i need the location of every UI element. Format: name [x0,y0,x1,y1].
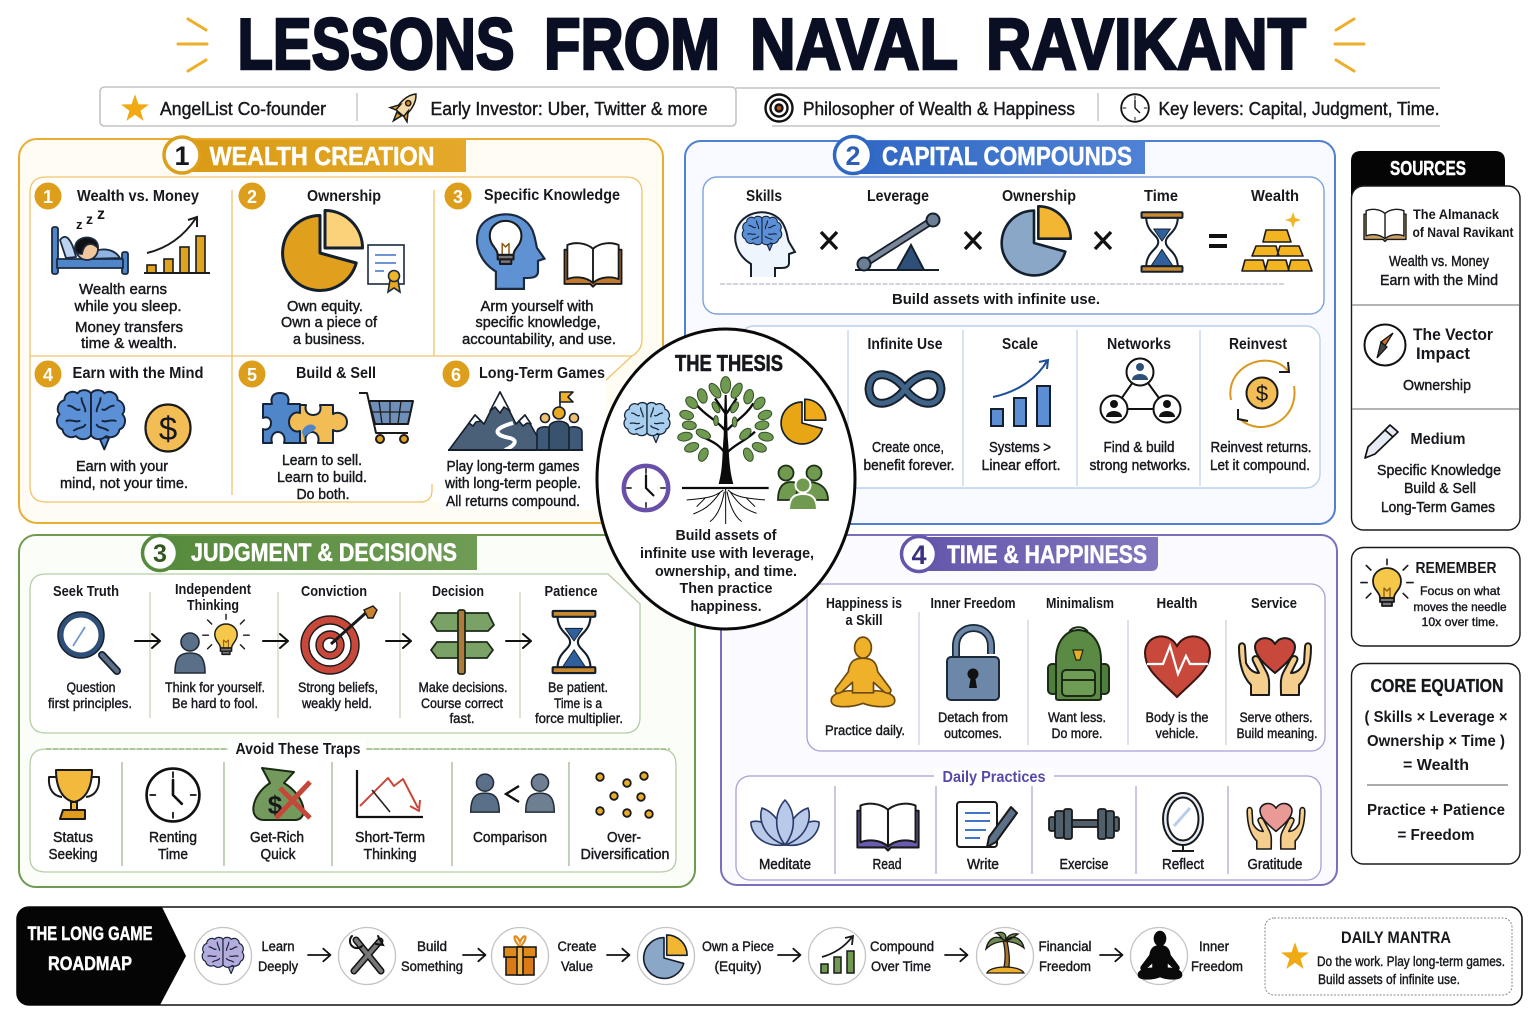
thesis circle: ownership, and time. [655,563,797,580]
icon: gratitude hands [1247,804,1305,849]
section: daily practices: Reflect [1162,857,1204,873]
source: medium [1365,425,1501,516]
roadmap title: THE LONG GAME [28,924,152,945]
icon: lever [855,214,940,270]
panel: sources [1351,151,1520,530]
source: the almanack: Wealth vs. Money [1389,254,1490,270]
icon: hourglass [1142,212,1182,272]
icon: multiply signs [821,232,1111,249]
row: happiness principles: a Skill [846,612,882,629]
card: earn with the mind [34,360,204,492]
roadmap title [17,907,186,1005]
row: happiness principles: Body is the [1146,710,1208,725]
title: FROM [544,5,720,85]
step: financial freedom: Freedom [1039,959,1091,974]
step: inner freedom: Freedom [1191,959,1243,974]
card: long-term games [442,360,605,510]
callout: remember [1352,548,1520,646]
source: the almanack: of Naval Ravikant [1412,224,1514,240]
icon: scaling bars [991,360,1050,426]
icon: rising bars [144,217,210,273]
icon: signpost [431,610,494,674]
icon: rocket [385,87,424,128]
row: decision flow: fast. [450,711,474,726]
callout: remember: 10x over time. [1422,615,1498,629]
card: ownership: 2 [247,187,257,207]
card: specific knowledge: 3 [453,187,463,207]
callout: remember: Focus on what [1420,584,1501,598]
equation: skills x leverage x ownership x time = wealth: Skills [746,188,782,205]
icon: equals sign [1209,236,1227,246]
section: avoid these traps: Quick [260,847,296,863]
card: build and sell: Learn to sell. [282,453,362,469]
row: decision flow: force multiplier. [535,711,623,726]
row: compounding levers: Networks [1107,336,1171,353]
source: the almanack: Earn with the Mind [1380,273,1498,289]
row: decision flow: Think for yourself. [165,680,265,695]
thesis circle [597,329,855,629]
subtitle bar: Philosopher of Wealth & Happiness [803,98,1075,119]
icon: network [1100,358,1180,422]
section: daily practices: Exercise [1060,857,1108,873]
card: specific knowledge [444,182,622,348]
section: avoid these traps: Thinking [364,847,416,863]
icon: notepad and pen [957,802,1017,847]
step: learn deeply: Deeply [258,959,298,974]
row: happiness principles: vehicle. [1156,726,1198,741]
icon: trophy [49,770,99,819]
card: build and sell [238,360,413,503]
section: daily practices [751,768,1305,873]
row: compounding levers: Infinite Use [868,336,943,353]
source: the vector impact: Ownership [1403,378,1471,394]
equation: skills x leverage x ownership x time = wealth: Build assets with infinite use. [892,291,1100,308]
icon: clock [1121,94,1149,122]
subtitle bar: Key levers: Capital, Judgment, Time. [1158,98,1440,119]
row: happiness principles: Health [1156,595,1198,612]
icon: certificate [368,245,404,292]
panel: judgment and decisions [19,535,695,887]
roadmap title: ROADMAP [48,954,132,975]
section: daily practices: Gratitude [1248,857,1302,873]
callout: core equation: Ownership × Time ) [1367,733,1505,750]
card: wealth vs money: 1 [43,187,53,207]
step: inner freedom: Inner [1199,939,1229,954]
icon: head with brain [735,212,795,277]
callout: core equation: CORE EQUATION [1370,675,1504,696]
callout: remember: REMEMBER [1416,560,1496,577]
row: decision flow: Course correct [421,696,503,711]
card: build and sell: Build & Sell [296,365,376,382]
icon: scattered dots [596,772,653,818]
thesis circle: THE THESIS [675,350,783,376]
icon: comparison [471,774,554,812]
row: decision flow: first principles. [48,696,132,711]
callout: core equation: ( Skills × Leverage × [1364,709,1508,726]
arrows [308,949,1122,961]
subtitle bar: Early Investor: Uber, Twitter & more [430,98,708,119]
row: happiness principles: Inner Freedom [930,595,1016,612]
row: compounding levers: Systems > [989,440,1051,456]
title [178,5,1364,85]
step: create value [504,936,596,975]
step: compound over time: Compound [870,939,934,954]
card: long-term games: 6 [451,365,461,385]
card: long-term games: Long-Term Games [479,365,605,382]
icon: gold bars [1242,230,1312,271]
callout: core equation: = Freedom [1398,827,1474,844]
row: decision flow [48,581,623,726]
row: decision flow: Decision [432,583,484,600]
panel: capital compounds [685,136,1335,524]
card: earn with the mind: 4 [43,365,53,385]
row: decision flow: Independent [175,581,251,598]
section: daily practices: Meditate [759,857,811,873]
icon: clock [147,769,199,821]
icon: sleeping in bed [52,227,128,274]
card: long-term games: All returns compound. [446,494,580,510]
icon: puzzle pieces [263,393,347,443]
row: compounding levers [864,336,1312,474]
subtitle bar [100,87,1440,128]
row: decision flow: Time is a [554,696,602,711]
section: daily practices: Write [967,857,999,873]
thesis circle: happiness. [690,598,762,615]
step: create value: Create [558,939,596,954]
card: ownership [238,182,404,348]
heading: judgment and decisions: 3 [153,540,167,568]
equation: skills x leverage x ownership x time = wealth: Ownership [1002,188,1076,205]
section: avoid these traps [48,741,670,863]
row: compounding levers: Reinvest [1229,336,1288,353]
equation: skills x leverage x ownership x time = wealth [735,188,1312,308]
icon: heart with pulse [1145,636,1210,697]
icon: backpack [1048,627,1109,700]
heading: wealth creation: 1 [174,141,190,171]
step: inner freedom [1138,931,1243,979]
callout: core equation: Practice + Patience [1367,802,1505,819]
source: the almanack [1364,206,1514,289]
row: decision flow: Make decisions. [418,680,508,695]
step: compound over time [821,936,934,974]
source: the almanack: The Almanack [1413,206,1499,222]
card: long-term games: Play long-term games [446,459,580,475]
step: build something [350,936,463,974]
heading: time and happiness: TIME & HAPPINESS [947,541,1147,569]
card: wealth vs money: Money transfers [75,320,183,336]
row: happiness principles [825,595,1318,741]
card: build and sell: Do both. [296,487,350,503]
row: happiness principles: Service [1251,595,1297,612]
icon: tree with roots [677,377,774,524]
source: medium: Specific Knowledge [1377,463,1501,479]
step: create value: Value [561,959,593,974]
heading: judgment and decisions: JUDGMENT & DECISIONS [191,539,457,567]
icon: magnifying glass [58,612,117,671]
step: build something: Something [401,959,463,974]
step: own a piece: (Equity) [714,959,762,974]
row: compounding levers: strong networks. [1090,458,1190,474]
icon: dumbbell [1049,809,1119,839]
card: build and sell: Learn to build. [277,470,367,486]
step: own a piece: Own a Piece [702,939,774,954]
step: learn deeply [202,937,298,974]
section: avoid these traps: Comparison [473,830,547,846]
icon: falling chart [357,770,423,817]
roadmap band [17,907,1522,1005]
thesis circle: Build assets of [676,527,777,544]
section: avoid these traps: Get-Rich [250,830,304,846]
section: avoid these traps: Time [158,847,188,863]
row: compounding levers: Create once, [872,440,944,456]
icon: dollar coin: $ [159,410,177,447]
heading: judgment and decisions [142,536,477,570]
arrows [135,634,531,648]
equation: skills x leverage x ownership x time = wealth: Wealth [1251,188,1299,205]
row: happiness principles: Serve others. [1240,710,1312,725]
row: happiness principles: Detach from [938,710,1008,725]
card: earn with the mind: mind, not your time. [60,476,188,492]
icon: open book [564,243,622,287]
panel: sources: SOURCES [1390,158,1466,180]
row: compounding levers: Let it compound. [1210,458,1310,474]
row: decision flow: Strong beliefs, [298,680,378,695]
heading: time and happiness [902,536,1158,572]
source: medium: Long-Term Games [1381,500,1495,516]
row: happiness principles: Practice daily. [825,723,905,738]
card: wealth vs money: Wealth earns [79,282,167,298]
card: ownership: Own equity. [287,299,363,315]
row: decision flow: Be hard to fool. [172,696,258,711]
card: wealth vs money: time & wealth. [81,336,177,352]
icon: mirror [1163,793,1203,851]
card: wealth vs money: while you sleep. [73,299,182,315]
icon: brain [624,403,670,442]
source: the vector impact: Impact [1416,345,1471,363]
card: specific knowledge: specific knowledge, [476,315,600,331]
card: wealth vs money: z [76,217,83,232]
callout: daily mantra [1265,918,1512,995]
heading: capital compounds: CAPITAL COMPOUNDS [882,141,1132,171]
card: wealth vs money [34,182,210,352]
card: specific knowledge: Specific Knowledge [484,187,620,204]
icon: brain [57,390,125,449]
thesis circle: infinite use with leverage, [640,545,814,562]
row: happiness principles: Minimalism [1046,595,1114,612]
panel: time and happiness [721,535,1337,885]
subtitle bar: AngelList Co-founder [160,98,326,119]
row: happiness principles: Build meaning. [1236,726,1318,741]
section: avoid these traps: Renting [149,830,197,846]
heading: wealth creation [164,137,466,173]
step: own a piece [644,935,774,978]
card: wealth vs money: Wealth vs. Money [77,188,199,205]
row: decision flow: Be patient. [548,680,608,695]
heading: capital compounds: 2 [845,141,861,171]
icon: target with arrow [301,606,377,674]
step: build something: Build [417,939,447,954]
thesis circle: Then practice [680,580,772,597]
callout: remember: moves the needle [1414,600,1507,614]
section: avoid these traps: Avoid These Traps [236,741,361,758]
callout: daily mantra: Do the work. Play long-term games. [1317,954,1505,969]
source: the vector impact [1364,324,1494,394]
title: NAVAL [750,5,958,85]
row: decision flow: Thinking [187,597,239,614]
card: wealth vs money: z [97,206,105,223]
icon: open book [857,804,919,850]
card: earn with the mind: Earn with the Mind [72,365,204,382]
row: happiness principles: Do more. [1052,726,1102,741]
row: compounding levers: benefit forever. [864,458,954,474]
heading: time and happiness: 4 [911,540,927,570]
source: medium: Medium [1410,431,1466,448]
equation: skills x leverage x ownership x time = wealth: Time [1144,188,1178,205]
section: avoid these traps: Status [53,830,93,846]
step: compound over time: Over Time [871,959,931,974]
callout: core equation [1352,664,1520,864]
row: decision flow: Question [66,680,116,695]
section: avoid these traps: Short-Term [355,830,425,846]
icon: reinvest cycle [1230,361,1295,427]
step: financial freedom: Financial [1038,939,1092,954]
icon: open padlock [947,628,999,700]
icon: star [121,94,149,121]
row: compounding levers: Linear effort. [982,458,1060,474]
callout: daily mantra: Build assets of infinite use. [1318,972,1460,987]
row: happiness principles: Happiness is [826,595,902,612]
card: long-term games: with long-term people. [444,476,581,492]
card: specific knowledge: Arm yourself with [480,299,594,315]
row: decision flow: Patience [544,583,598,600]
icon: hands holding heart [1239,638,1311,695]
panel: wealth creation [19,137,663,523]
row: happiness principles: outcomes. [944,726,1002,741]
icon: pie chart [283,210,362,290]
heading: capital compounds [834,136,1145,174]
title: RAVIKANT [986,5,1306,85]
equation: skills x leverage x ownership x time = wealth: Leverage [867,188,929,205]
source: the vector impact: The Vector [1413,326,1494,344]
section: avoid these traps: Diversification [580,847,670,863]
section: avoid these traps: Seeking [48,847,98,863]
icon: dollar coin [146,404,190,452]
row: decision flow: Conviction [301,583,367,600]
step: learn deeply: Learn [262,939,294,954]
row: happiness principles: Want less. [1048,710,1106,725]
icon: hourglass [553,611,595,673]
card: earn with the mind: Earn with your [76,459,168,475]
icon: pie chart [1002,206,1071,275]
section: avoid these traps: Over- [607,830,641,846]
row: decision flow: weakly held. [301,696,372,711]
card: ownership: Ownership [307,188,381,205]
section: daily practices: Read [872,857,902,873]
icon: money bag crossed out [253,768,310,820]
heading: wealth creation: WEALTH CREATION [210,141,434,171]
source: medium: Build & Sell [1404,481,1476,497]
callout: daily mantra: DAILY MANTRA [1341,929,1451,947]
card: ownership: a business. [293,332,365,348]
card: specific knowledge: accountability, and use. [462,332,616,348]
icon: target [766,94,792,122]
icon: meditating figure [831,637,895,707]
row: decision flow: Seek Truth [53,583,119,600]
icon: money bag crossed out: $ [268,790,283,820]
title: LESSONS [238,5,514,85]
icon: pie chart [781,399,826,444]
card: wealth vs money: z [86,211,93,227]
card: build and sell: 5 [247,365,257,385]
icon: purple clock [624,466,668,510]
icon: group of people [778,466,828,510]
icon: infinity [869,375,941,403]
step: financial freedom [986,932,1092,974]
row: compounding levers: Find & build [1104,440,1174,456]
callout: core equation: = Wealth [1403,757,1469,774]
icon: mountains and team [448,392,583,450]
icon: person with idea [175,614,249,673]
icon: shopping cart [359,393,413,443]
row: compounding levers: Reinvest returns. [1210,440,1312,456]
icon: head with bulb [477,214,544,289]
icon: lotus [751,800,819,845]
card: ownership: Own a piece of [281,315,378,331]
row: compounding levers: Scale [1002,336,1038,353]
icon: reinvest cycle: $ [1256,381,1268,406]
section: daily practices: Daily Practices [942,769,1046,786]
